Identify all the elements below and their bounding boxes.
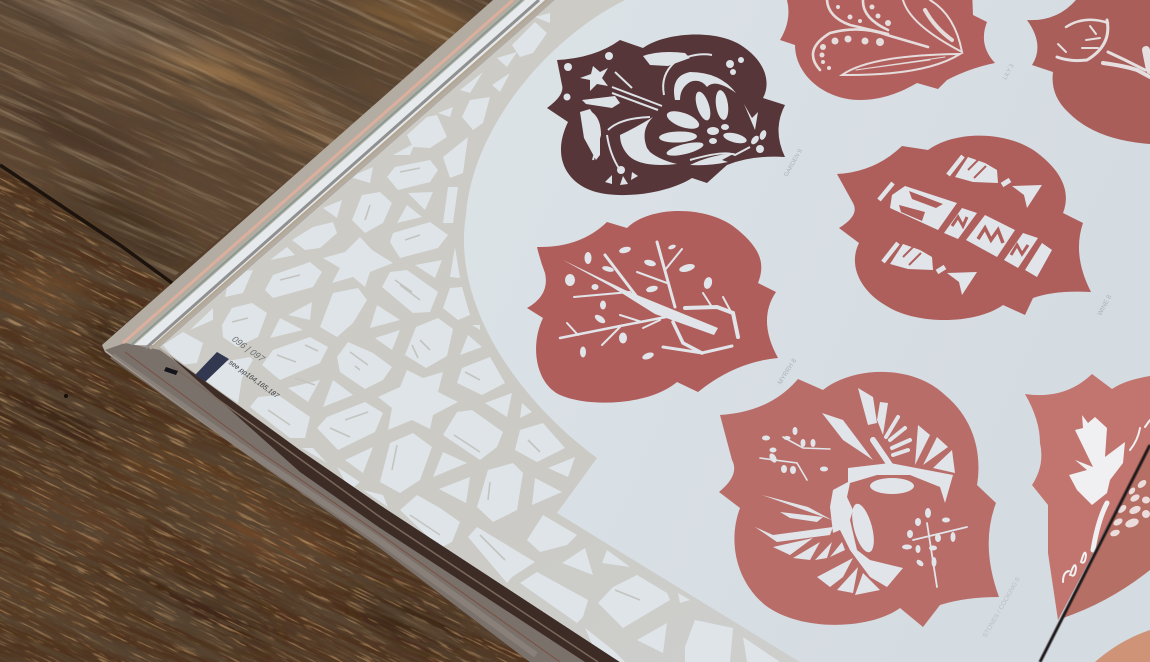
geometric lattice pattern — [160, 0, 800, 662]
emblem: garden label: GARDEN 9 — [784, 148, 804, 178]
emblem: right page with dot flower — [1063, 447, 1150, 618]
wine label: WINE 8 — [1097, 294, 1113, 317]
emblem: left of spine with vine leaf — [1025, 374, 1150, 620]
emblem: stones and cooking bird — [719, 372, 999, 627]
emblem: top right antlers — [1027, 0, 1150, 144]
stones and cooking label: STONES / COOKING 8 — [982, 576, 1022, 639]
folio number: 096 | 097 — [229, 335, 267, 363]
icon: wine goblet lower — [883, 243, 977, 295]
icon: amphora — [879, 183, 1052, 277]
icon: wine goblet upper — [948, 156, 1042, 208]
peach arc on right page — [1095, 630, 1150, 662]
emblem: wine — [837, 136, 1091, 320]
top label: LILY 3 — [1002, 63, 1016, 81]
cross reference note: see pp164,165,187 — [226, 359, 281, 400]
emblem: top centre lily — [780, 0, 995, 100]
emblem: myrrh tree — [527, 211, 778, 403]
emblem: garden (dark) — [547, 34, 785, 195]
cover edge stripes — [123, 0, 547, 349]
book spine gutter — [1040, 445, 1150, 662]
colour key bar — [195, 352, 229, 382]
myrrh label: MYRRH 8 — [777, 357, 798, 386]
